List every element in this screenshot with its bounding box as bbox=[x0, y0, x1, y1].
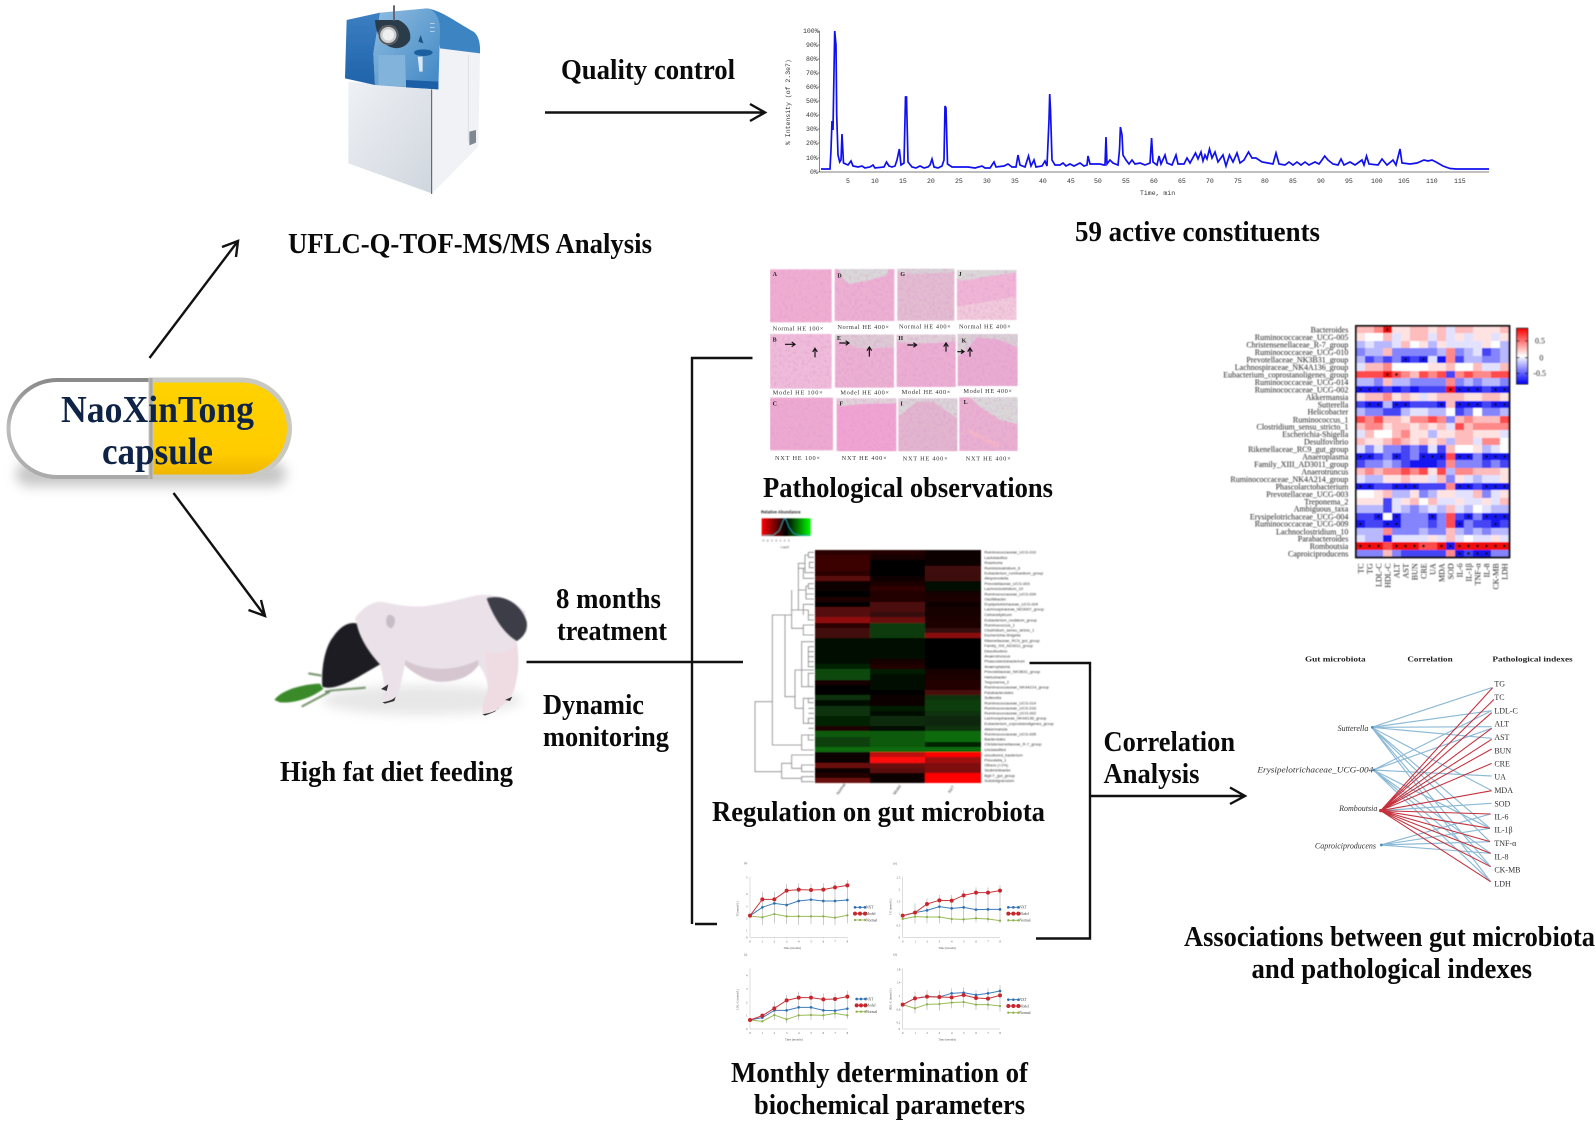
chart: correlation heatmap: Ruminococcaceae_UCG-009 bbox=[1255, 520, 1348, 529]
chart: chromatogram: 40% bbox=[806, 112, 818, 119]
label: dynamic monitoring: monitoring bbox=[543, 722, 669, 753]
chart: gut microbiota heatmap: Family_XIII_AD3011_group bbox=[984, 643, 1034, 648]
chart: chromatogram: 10% bbox=[806, 155, 818, 162]
chart: panel a: TC(mmol/L) bbox=[736, 901, 740, 917]
label: associations between gut microbiota and pathological indexes bbox=[1184, 922, 1595, 985]
chart: panel c: LDL-C (mmol/L) bbox=[736, 989, 740, 1010]
panel: histology images: F bbox=[839, 401, 843, 407]
label: 8 months treatment bbox=[556, 584, 668, 647]
capsule name: NaoXinTong bbox=[61, 389, 254, 431]
chart: microbiota to index network: Gut microbiota bbox=[1305, 655, 1366, 664]
chart: microbiota to index network: TG bbox=[1494, 680, 1505, 689]
chart: gut microbiota heatmap: -3 -2 -1 0 1 2 3 bbox=[762, 538, 790, 542]
chart: chromatogram: 15 bbox=[899, 178, 907, 185]
chart: panel d: 0.6 bbox=[897, 1007, 901, 1011]
label: correlation analysis: Correlation bbox=[1104, 727, 1235, 758]
chart: correlation heatmap: -0.5 bbox=[1533, 369, 1546, 378]
chart: chromatogram: 70 bbox=[1206, 178, 1214, 185]
chart: correlation heatmap: Anaeroplasma bbox=[1302, 453, 1349, 462]
chart: panel b: 0.5 bbox=[897, 924, 901, 928]
panel: histology images: D bbox=[837, 273, 842, 279]
panel: histology images: Normal HE 400× bbox=[837, 324, 889, 331]
chart: panel a: 1 bbox=[746, 929, 748, 933]
chart: panel d bbox=[888, 953, 1031, 1042]
capsule word: capsule bbox=[102, 431, 213, 473]
panel: histology images: E bbox=[837, 336, 841, 342]
chart: correlation heatmap: Desulfovibrio bbox=[1304, 438, 1348, 447]
chart: gut microbiota heatmap: Prevotellaceae_NK3B31_group bbox=[984, 669, 1041, 674]
chart: panel c bbox=[736, 953, 877, 1042]
chart: chromatogram: 100% bbox=[803, 28, 819, 35]
chart: microbiota to index network bbox=[1256, 655, 1573, 888]
chart: microbiota to index network: Pathological indexes bbox=[1492, 655, 1573, 664]
chart: correlation heatmap: Erysipelotrichaceae_UCG-004 bbox=[1250, 512, 1348, 521]
chart: panel b: 1.5 bbox=[897, 900, 901, 904]
chart: panel c: Model bbox=[866, 1004, 876, 1008]
chart: correlation heatmap: Clostridium_sensu_stricto_1 bbox=[1257, 423, 1348, 432]
chart: correlation heatmap: Prevotellaceae_UCG-003 bbox=[1266, 490, 1348, 499]
chart: chromatogram: 25 bbox=[955, 178, 963, 185]
chart: correlation heatmap: CK-MB bbox=[1491, 563, 1500, 590]
chart: correlation heatmap: 0.5 bbox=[1535, 337, 1545, 346]
chart: microbiota to index network: AST bbox=[1494, 733, 1510, 742]
chart: gut microbiota heatmap: Ruminococcaceae_UCG-010 bbox=[984, 550, 1037, 555]
chart: gut microbiota heatmap: Christensenellaceae_R-7_group bbox=[984, 742, 1042, 747]
label: dynamic monitoring bbox=[543, 690, 669, 753]
chart: chromatogram: 55 bbox=[1122, 178, 1130, 185]
chart: gut microbiota heatmap: Subdoligranulum bbox=[984, 778, 1015, 783]
chart: correlation heatmap: TNF-α bbox=[1473, 563, 1482, 585]
chart: gut microbiota heatmap: Anaeroplasma bbox=[984, 664, 1011, 669]
label: correlation analysis bbox=[1104, 727, 1235, 790]
chart: panel a: Normal bbox=[866, 918, 877, 922]
chart: gut microbiota heatmap: Escherichia-Shigella bbox=[984, 633, 1021, 638]
chart: correlation heatmap: Bacteroides bbox=[1311, 326, 1348, 335]
chart: panel b: 012345678 bbox=[902, 939, 1001, 943]
connector: pig to outcomes bracket bbox=[526, 358, 752, 924]
chart: panel d: Model bbox=[1019, 1004, 1029, 1008]
chart: correlation heatmap: Family_XIII_AD3011_group bbox=[1254, 460, 1348, 469]
chart: microbiota to index network: SOD bbox=[1494, 799, 1511, 808]
chart: correlation heatmap: Ruminococcaceae_UCG-002 bbox=[1255, 385, 1348, 394]
chart: microbiota to index network: Romboutsia bbox=[1338, 804, 1377, 813]
chart: chromatogram: % Intensity (of 2.3e7) bbox=[785, 59, 792, 145]
chart: correlation heatmap: Rikenellaceae_RC9_gut_group bbox=[1248, 445, 1348, 454]
chart: chromatogram: 95 bbox=[1345, 178, 1353, 185]
chart: gut microbiota heatmap: Relative Abundance bbox=[761, 509, 801, 514]
panel: histology images: NXT HE 400× bbox=[903, 456, 948, 463]
chart: panel b bbox=[888, 862, 1031, 950]
chart: gut microbiota heatmap: Rikenellaceae_RC9_gut_group bbox=[984, 638, 1040, 643]
panel: histology images: Model HE 400× bbox=[902, 389, 951, 396]
chart: panel c: Time (months) bbox=[785, 1038, 803, 1042]
chart: correlation heatmap: IL-1β bbox=[1464, 563, 1473, 582]
chart: gut microbiota heatmap: Oscillibacter bbox=[984, 596, 1007, 601]
chart: gut microbiota heatmap: Unclassified bbox=[984, 747, 1006, 752]
chart: gut microbiota heatmap: Alloprevotella bbox=[984, 576, 1009, 581]
chart: panel d: NXT bbox=[1019, 998, 1028, 1002]
chart: correlation heatmap: Phascolarctobacterium bbox=[1276, 482, 1349, 491]
chart: gut microbiota heatmap: uncultured_bacterium bbox=[984, 752, 1023, 757]
chart: microbiota to index network: LDL-C bbox=[1494, 706, 1518, 715]
chart: correlation heatmap: Ruminococcaceae_NK4A214_group bbox=[1230, 475, 1348, 484]
chart: correlation heatmap: Ruminococcaceae_UCG-005 bbox=[1255, 333, 1348, 342]
panel: histology images: Normal HE 100× bbox=[773, 326, 824, 333]
chart: correlation heatmap: Treponema_2 bbox=[1304, 497, 1348, 506]
chart: gut microbiota heatmap: Phascolarctobacterium bbox=[984, 659, 1026, 664]
label: 8 months treatment: 8 months bbox=[556, 584, 661, 615]
chart: gut microbiota heatmap: Ruminococcaceae_UCG-002 bbox=[984, 711, 1037, 716]
chart: chromatogram: 100 bbox=[1371, 178, 1383, 185]
chart: chromatogram: 5 bbox=[846, 178, 850, 185]
chart: gut microbiota heatmap: Prevotellaceae_UCG-003 bbox=[984, 581, 1031, 586]
chart: gut microbiota heatmap: Eubacterium_coprostanoligenes_group bbox=[984, 721, 1054, 726]
chart: microbiota to index network: IL-8 bbox=[1494, 852, 1509, 861]
chart: gut microbiota heatmap: Lachnospiraceae_ND3007_group bbox=[984, 607, 1045, 612]
chart: gut microbiota heatmap: Eubacterium_ruminantium_group bbox=[984, 570, 1044, 575]
chart: correlation heatmap: Ruminococcaceae_UCG-010 bbox=[1255, 348, 1348, 357]
label: pathological observations: Pathological observations bbox=[763, 473, 1053, 504]
label: dynamic monitoring: Dynamic bbox=[543, 690, 644, 721]
chart: correlation heatmap: 0 bbox=[1539, 353, 1543, 362]
chart: panel d: HDL-C (mmol/L) bbox=[888, 989, 892, 1010]
chart: microbiota to index network: TNF-α bbox=[1494, 839, 1516, 848]
chart: gut microbiota heatmap: Treponema_2 bbox=[984, 679, 1010, 684]
chart: gut microbiota heatmap: Sutterella bbox=[984, 695, 1002, 700]
chart: gut microbiota heatmap: Sediminibacter bbox=[984, 768, 1011, 773]
chart: chromatogram: 45 bbox=[1067, 178, 1075, 185]
panel: histology images: Model HE 400× bbox=[963, 388, 1012, 395]
chart: panel b: 2.5 bbox=[897, 875, 901, 879]
chart: panel b: 0 bbox=[899, 935, 901, 939]
chart: microbiota to index network: TC bbox=[1494, 693, 1505, 702]
chart: panel d: 1.8 bbox=[897, 967, 901, 971]
chart: panel c: 3 bbox=[746, 987, 748, 991]
chart: correlation heatmap: ALT bbox=[1392, 563, 1401, 578]
chart: microbiota to index network: Erysipelotrichaceae_UCG-004 bbox=[1256, 766, 1373, 775]
chart: microbiota to index network: UA bbox=[1494, 773, 1506, 782]
chart: correlation heatmap: IL-6 bbox=[1455, 563, 1464, 578]
chart: panel c: 4 bbox=[746, 973, 748, 977]
panel: histology images: NXT HE 400× bbox=[966, 455, 1011, 462]
chart: correlation heatmap: Prevotellaceae_NK3B31_group bbox=[1246, 356, 1348, 365]
chart: panel c: 012345678 bbox=[749, 1031, 849, 1035]
chart: correlation heatmap: Romboutsia bbox=[1310, 542, 1349, 551]
chart: panel a bbox=[736, 861, 877, 950]
chart: panel c: 0 bbox=[746, 1027, 748, 1031]
arrow: capsule to high fat diet bbox=[174, 493, 265, 616]
chart: gut microbiota heatmap: Ruminococcaceae_UCG-005 bbox=[984, 731, 1037, 736]
chart: gut microbiota heatmap: Roseburia bbox=[984, 560, 1003, 565]
chart: gut microbiota heatmap: Erysipelotrichaceae_UCG-004 bbox=[984, 602, 1039, 607]
chart: panel a: 0 bbox=[746, 935, 748, 939]
panel: histology images: H bbox=[898, 336, 903, 342]
chart: panel d: 012345678 bbox=[902, 1031, 1001, 1035]
icon: pig eating bbox=[274, 595, 527, 716]
chart: panel a: 012345678 bbox=[749, 939, 849, 943]
chart: panel d: Time (months) bbox=[938, 1038, 956, 1042]
chart: gut microbiota heatmap: Ruminiclostridium_6 bbox=[984, 565, 1021, 570]
chart: microbiota to index network: IL-1β bbox=[1494, 826, 1513, 835]
chart: microbiota to index network: IL-6 bbox=[1494, 813, 1509, 822]
panel: histology images: K bbox=[962, 339, 967, 345]
label: UFLC analysis: UFLC-Q-TOF-MS/MS Analysis bbox=[288, 229, 652, 260]
chart: microbiota to index network: CK-MB bbox=[1494, 866, 1521, 875]
chart: correlation heatmap: Parabacteroides bbox=[1298, 535, 1348, 544]
chart: correlation heatmap: Ruminococcus_1 bbox=[1293, 415, 1348, 424]
chart group: monthly biochemical line charts bbox=[736, 861, 1031, 1042]
chart: correlation heatmap: TG bbox=[1365, 563, 1374, 574]
chart: panel b: Normal bbox=[1019, 919, 1031, 923]
chart: chromatogram: 110 bbox=[1426, 178, 1438, 185]
chart: chromatogram: Time, min bbox=[1140, 190, 1175, 197]
chart: gut microbiota heatmap bbox=[755, 509, 1054, 796]
chart: correlation heatmap: AST bbox=[1401, 563, 1410, 578]
chart: correlation heatmap: Helicobacter bbox=[1308, 408, 1349, 417]
chart: panel b: NXT bbox=[1019, 906, 1028, 910]
panel: histology images: J bbox=[959, 272, 962, 278]
chart: panel c: Normal bbox=[866, 1010, 877, 1014]
chart: gut microbiota heatmap: Normal bbox=[835, 782, 847, 796]
chart: gut microbiota heatmap: Model bbox=[892, 784, 902, 796]
panel: histology images: A bbox=[773, 272, 778, 278]
chart: gut microbiota heatmap: Lactobacillus bbox=[984, 555, 1007, 560]
chart: chromatogram: 60% bbox=[806, 84, 818, 91]
label: associations between gut microbiota and pathological indexes: and pathological indexes bbox=[1252, 954, 1532, 985]
chart: panel b: (b) bbox=[893, 862, 897, 866]
chart: chromatogram: 80% bbox=[806, 56, 818, 63]
chart: gut microbiota heatmap: Helicobacter bbox=[984, 674, 1007, 679]
chart: gut microbiota heatmap: Eubacterium_nodatum_group bbox=[984, 617, 1038, 622]
icon: NaoXinTong capsule bbox=[8, 378, 289, 486]
chart: panel b: 1 bbox=[899, 911, 901, 915]
chart: gut microbiota heatmap: Log(2) bbox=[781, 545, 789, 549]
panel: histology images: NXT HE 400× bbox=[842, 455, 887, 462]
icon: mass spectrometer instrument bbox=[345, 5, 480, 194]
chart: correlation heatmap: Akkermansia bbox=[1306, 393, 1349, 402]
chart: panel c: NXT bbox=[866, 997, 874, 1001]
chart: gut microbiota heatmap: Others (<1%) bbox=[984, 763, 1009, 768]
chart: chromatogram: 50% bbox=[806, 98, 818, 105]
chart: microbiota to index network: Correlation bbox=[1407, 655, 1453, 664]
chart: microbiota to index network: CRE bbox=[1494, 759, 1510, 768]
chart: correlation heatmap: LDL-C bbox=[1374, 563, 1383, 587]
chart: correlation heatmap: Lachnospiraceae_NK4A136_group bbox=[1235, 363, 1348, 372]
panel: histology images: C bbox=[773, 401, 777, 407]
panel: histology images: Model HE 400× bbox=[840, 389, 889, 396]
chart: chromatogram: 20% bbox=[806, 140, 818, 147]
chart: correlation heatmap: Caproiciproducens bbox=[1288, 550, 1348, 559]
chart: correlation heatmap: BUN bbox=[1410, 563, 1419, 580]
label: monthly determination of biochemical parameters bbox=[731, 1058, 1029, 1121]
chart: panel d: Normal bbox=[1019, 1011, 1031, 1015]
panel: histology images bbox=[770, 269, 1018, 463]
chart: correlation heatmap: IL-8 bbox=[1482, 563, 1491, 578]
chart: panel b: Time (months) bbox=[938, 946, 956, 950]
chart: panel c: 2 bbox=[746, 1001, 748, 1005]
chart: panel d: 0.2 bbox=[897, 1021, 901, 1025]
chart: gut microbiota heatmap: Bacteroides bbox=[984, 737, 1005, 742]
chart: correlation heatmap: MDA bbox=[1437, 563, 1446, 582]
chart: gut microbiota heatmap: Prevotella_1 bbox=[984, 757, 1007, 762]
label: quality control: Quality control bbox=[561, 55, 735, 86]
chart: chromatogram bbox=[785, 28, 1489, 197]
chart: panel a: 4 bbox=[746, 892, 748, 896]
chart: correlation heatmap: HDL-C bbox=[1383, 563, 1392, 588]
chart: chromatogram: 30 bbox=[983, 178, 991, 185]
chart: correlation heatmap: Escherichia-Shigella bbox=[1282, 430, 1349, 439]
chart: chromatogram: 80 bbox=[1261, 178, 1269, 185]
label: 8 months treatment: treatment bbox=[557, 616, 668, 647]
chart: panel b: TG (mmol/L) bbox=[888, 899, 892, 915]
chart: chromatogram: 30% bbox=[806, 126, 818, 133]
panel: histology images: Normal HE 400× bbox=[899, 324, 951, 331]
chart: panel a: 5 bbox=[746, 875, 748, 879]
chart: chromatogram: 75 bbox=[1234, 178, 1242, 185]
connector: correlation analysis arrow bbox=[1030, 663, 1245, 938]
chart: panel d: 0 bbox=[899, 1027, 901, 1031]
chart: correlation heatmap: Eubacterium_coprostanoligenes_group bbox=[1223, 370, 1348, 379]
chart: chromatogram: 50 bbox=[1094, 178, 1102, 185]
chart: panel c: 1 bbox=[746, 1014, 748, 1018]
chart: gut microbiota heatmap: Ruminococcaceae_UCG-009 bbox=[984, 591, 1037, 596]
label: high fat diet feeding: High fat diet feeding bbox=[280, 757, 513, 788]
chart: chromatogram: 0% bbox=[810, 169, 818, 176]
chart: panel a: (a) bbox=[744, 861, 747, 865]
chart: panel a: 2 bbox=[746, 916, 748, 920]
panel: histology images: L bbox=[964, 400, 968, 406]
chart: gut microbiota heatmap: Parabacteroides bbox=[984, 690, 1013, 695]
chart: gut microbiota heatmap: Ruminococcaceae_UCG-016 bbox=[984, 705, 1037, 710]
chart: microbiota to index network: ALT bbox=[1494, 719, 1509, 728]
chart: panel a: 3 bbox=[746, 904, 748, 908]
chart: correlation heatmap: LDH bbox=[1500, 563, 1509, 580]
chart: chromatogram: 65 bbox=[1178, 178, 1186, 185]
chart: chromatogram: 90 bbox=[1317, 178, 1325, 185]
arrow: capsule to UFLC analysis bbox=[150, 241, 238, 358]
chart: correlation heatmap: Sutterella bbox=[1318, 400, 1349, 409]
chart: chromatogram: 60 bbox=[1150, 178, 1158, 185]
chart: gut microbiota heatmap: Ruminococcaceae_NK4A214_group bbox=[984, 685, 1050, 690]
chart: panel c: (c) bbox=[744, 953, 747, 957]
chart: gut microbiota heatmap: Cellulosilyticum bbox=[984, 612, 1012, 617]
label: 59 active constituents: 59 active constituents bbox=[1075, 217, 1320, 248]
chart: correlation heatmap: TC bbox=[1356, 563, 1365, 574]
chart: gut microbiota heatmap: Clostridium_sensu_stricto_1 bbox=[984, 628, 1035, 633]
panel: histology images: G bbox=[900, 272, 905, 278]
label: monthly determination of biochemical parameters: Monthly determination of bbox=[731, 1058, 1029, 1089]
panel: histology images: I bbox=[900, 401, 903, 407]
chart: microbiota to index network: Sutterella bbox=[1338, 724, 1368, 733]
chart: panel b: Model bbox=[1019, 912, 1029, 916]
chart: chromatogram: 85 bbox=[1289, 178, 1297, 185]
arrow: quality control bbox=[545, 104, 765, 121]
chart: correlation heatmap: Ruminococcaceae_UCG-014 bbox=[1255, 378, 1348, 387]
chart: panel b: 2 bbox=[899, 888, 901, 892]
chart: gut microbiota heatmap: Lachnoclostridium_10 bbox=[984, 586, 1024, 591]
chart: chromatogram: 105 bbox=[1398, 178, 1410, 185]
chart: microbiota to index network: MDA bbox=[1494, 786, 1513, 795]
chart: correlation heatmap: Anaerotruncus bbox=[1301, 467, 1348, 476]
chart: correlation heatmap: CRE bbox=[1419, 563, 1428, 579]
panel: histology images: Normal HE 400× bbox=[959, 323, 1011, 330]
chart: chromatogram: 40 bbox=[1039, 178, 1047, 185]
chart: correlation heatmap: SOD bbox=[1446, 563, 1455, 579]
chart: chromatogram: 115 bbox=[1454, 178, 1466, 185]
label: monthly determination of biochemical parameters: biochemical parameters bbox=[754, 1090, 1025, 1121]
chart: gut microbiota heatmap: Ruminococcus_1 bbox=[984, 622, 1016, 627]
chart: gut microbiota heatmap: Lachnospiraceae_NK4A136_group bbox=[984, 716, 1047, 721]
chart: panel d: 1 bbox=[899, 994, 901, 998]
chart: microbiota to index network: BUN bbox=[1494, 746, 1511, 755]
panel: histology images: Model HE 100× bbox=[773, 389, 823, 396]
chart: panel d: (d) bbox=[893, 953, 897, 957]
chart: panel d: 1.4 bbox=[897, 981, 901, 985]
chart: gut microbiota heatmap: NXT bbox=[947, 784, 956, 794]
chart: chromatogram: 20 bbox=[927, 178, 935, 185]
chart: microbiota to index network: Caproiciproducens bbox=[1315, 842, 1376, 851]
chart: correlation heatmap: UA bbox=[1428, 563, 1437, 575]
chart: correlation heatmap: Ambiguous_taxa bbox=[1294, 505, 1349, 514]
chart: correlation heatmap bbox=[1223, 326, 1546, 590]
chart: panel a: Model bbox=[866, 912, 876, 916]
chart: panel a: NXT bbox=[866, 906, 874, 910]
chart: gut microbiota heatmap: Desulfovibrio bbox=[984, 648, 1008, 653]
chart: chromatogram: 35 bbox=[1011, 178, 1019, 185]
label: correlation analysis: Analysis bbox=[1104, 759, 1200, 790]
chart: chromatogram: 90% bbox=[806, 42, 818, 49]
chart: gut microbiota heatmap: Anaerotruncus bbox=[984, 654, 1010, 659]
chart: chromatogram: 10 bbox=[871, 178, 879, 185]
chart: panel a: Time (months) bbox=[783, 946, 801, 950]
chart: correlation heatmap: Lachnoclostridium_10 bbox=[1276, 527, 1348, 536]
chart: chromatogram: 70% bbox=[806, 70, 818, 77]
label: regulation on gut microbiota: Regulation on gut microbiota bbox=[712, 797, 1045, 828]
chart: gut microbiota heatmap: Akkermansia bbox=[984, 726, 1008, 731]
chart: microbiota to index network: LDH bbox=[1494, 879, 1511, 888]
chart: gut microbiota heatmap: Bgil-T_gut_group bbox=[984, 773, 1016, 778]
chart: gut microbiota heatmap: Ruminococcaceae_UCG-014 bbox=[984, 700, 1037, 705]
panel: histology images: B bbox=[773, 337, 777, 343]
panel: histology images: NXT HE 100× bbox=[775, 455, 820, 462]
chart: correlation heatmap: Christensenellaceae_R-7_group bbox=[1246, 341, 1348, 350]
